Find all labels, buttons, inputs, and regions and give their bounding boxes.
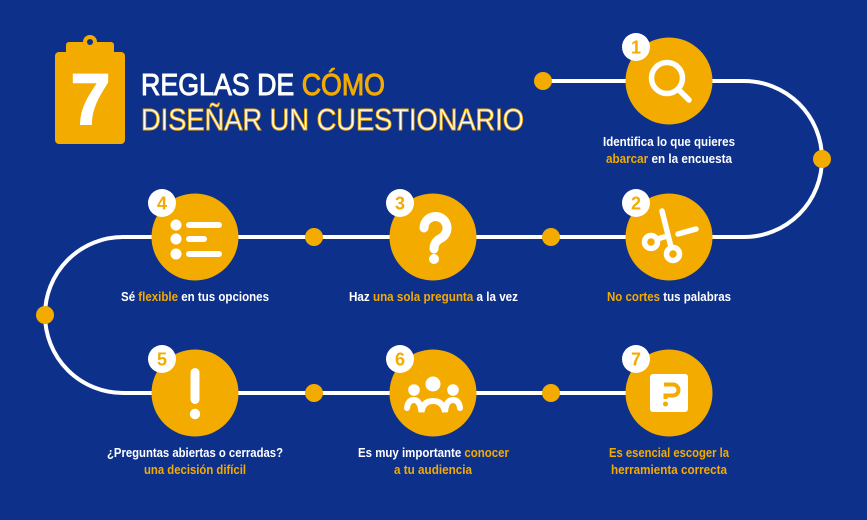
winding path connector <box>45 81 822 393</box>
badge 6 <box>386 345 414 373</box>
caption 7 <box>609 445 730 477</box>
badge 7: 7 <box>631 350 641 370</box>
caption 1: Identifica lo que quieres <box>603 134 735 149</box>
step 2: do not cut words <box>607 189 731 304</box>
badge 5 <box>148 345 176 373</box>
icon: clipboard with number 7 <box>55 35 125 144</box>
badge 4 <box>148 189 176 217</box>
step 1: identify scope <box>603 33 735 166</box>
caption 5: ¿Preguntas abiertas o cerradas? <box>107 445 283 460</box>
title <box>141 67 524 137</box>
icon: list <box>170 220 219 260</box>
badge 4: 4 <box>157 194 167 214</box>
path dots <box>36 72 831 402</box>
caption 6 <box>358 445 509 477</box>
caption 3: Haz una sola pregunta a la vez <box>349 289 518 304</box>
caption 1 <box>603 134 735 166</box>
step 6: know your audience <box>358 345 509 477</box>
badge 3: 3 <box>395 194 405 214</box>
title: REGLAS DE CÓMO <box>141 67 385 102</box>
icon: question mark <box>424 217 447 264</box>
step 5: open or closed questions <box>107 345 283 477</box>
step 4: flexible options <box>121 189 269 304</box>
icon: clipboard with number 7: 7 <box>70 60 111 140</box>
badge 3 <box>386 189 414 217</box>
caption 7: herramienta correcta <box>611 462 728 477</box>
step 3: one question at a time <box>349 189 518 304</box>
caption 6: Es muy importante conocer <box>358 445 509 460</box>
badge 5: 5 <box>157 350 167 370</box>
caption 1: abarcar en la encuesta <box>606 151 733 166</box>
badge 1: 1 <box>631 38 641 58</box>
badge 2: 2 <box>631 194 641 214</box>
icon: exclamation mark <box>190 368 200 419</box>
caption 2: No cortes tus palabras <box>607 289 731 304</box>
icon: group of people <box>407 376 460 412</box>
caption 4: Sé flexible en tus opciones <box>121 289 269 304</box>
icon: magnifying glass <box>652 62 689 100</box>
icon: scissors <box>644 211 696 260</box>
icon: question mark in square <box>650 374 688 412</box>
caption 5: una decisión difícil <box>144 462 246 477</box>
caption 5 <box>107 445 283 477</box>
step 7: choose the right tool <box>609 345 730 477</box>
caption 7: Es esencial escoger la <box>609 445 730 460</box>
badge 6: 6 <box>395 350 405 370</box>
caption 6: a tu audiencia <box>394 462 473 477</box>
title: DISEÑAR UN CUESTIONARIO <box>141 102 524 137</box>
